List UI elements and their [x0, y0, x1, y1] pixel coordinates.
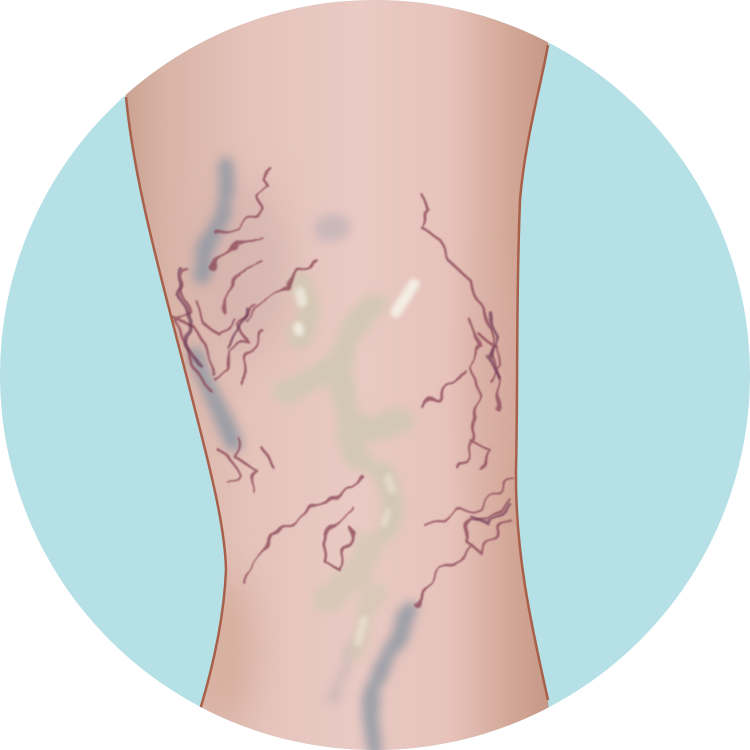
leg outline: [126, 45, 548, 710]
vein highlights: [298, 284, 414, 642]
pale raised veins: [285, 285, 400, 650]
leg skin: [120, 0, 555, 750]
spider veins: [172, 168, 512, 605]
leg: [120, 0, 555, 750]
deep blue-grey veins: [195, 165, 412, 750]
darker spider vein clusters: [178, 270, 510, 525]
skin shading and veins: [172, 165, 525, 750]
